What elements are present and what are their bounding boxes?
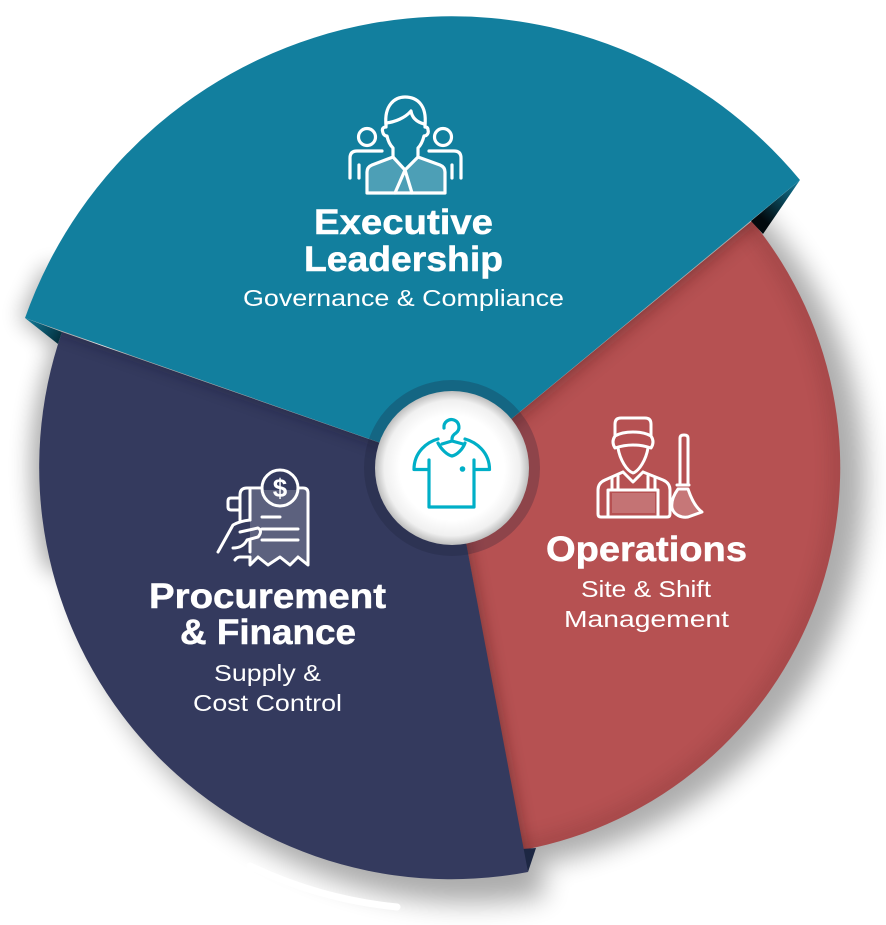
subtitle: site and shift management (564, 576, 730, 632)
icon: t-shirt on hanger (414, 420, 490, 507)
title: executive leadership (304, 203, 503, 279)
subtitle: governance: Governance & Compliance (243, 285, 564, 311)
title: procurement and finance: Procurement (149, 577, 386, 616)
shading from navy segment (466, 542, 532, 849)
title: procurement and finance (149, 577, 386, 652)
subtitle: site and shift management: Management (564, 606, 730, 632)
inner vignette (522, 222, 840, 848)
hub disc (375, 391, 529, 545)
wedge: teal fold (751, 180, 800, 234)
shading from teal segment (512, 222, 759, 428)
title: operations: Operations (546, 530, 747, 569)
icon: receipt (218, 470, 308, 565)
icon: executive group (350, 97, 461, 193)
hub ring (364, 380, 540, 556)
shadow: operations segment (87, 91, 865, 869)
subtitle: supply and cost control (193, 660, 342, 716)
title: procurement and finance: & Finance (180, 613, 356, 652)
wedge: navy fold (522, 848, 536, 872)
subtitle: supply and cost control: Cost Control (193, 690, 342, 716)
icon: cleaner with broom (598, 418, 702, 517)
title: executive leadership: Executive (314, 203, 493, 242)
subtitle: supply and cost control: Supply & (214, 660, 321, 686)
shadow: left of navy segment (30, 330, 90, 570)
wedge: teal left fold (25, 318, 62, 344)
subtitle: site and shift management: Site & Shift (581, 576, 712, 602)
icon: receipt: $ (273, 473, 288, 503)
panel: executive leadership segment (25, 16, 800, 468)
shading from teal segment (61, 332, 379, 444)
panel: procurement segment (20, 300, 528, 879)
panel: operations segment (466, 222, 840, 849)
title: executive leadership: Leadership (304, 240, 503, 279)
white arc (250, 866, 397, 907)
shadow: procurement segment (60, 492, 546, 903)
shadow: teal left tip (20, 268, 90, 348)
